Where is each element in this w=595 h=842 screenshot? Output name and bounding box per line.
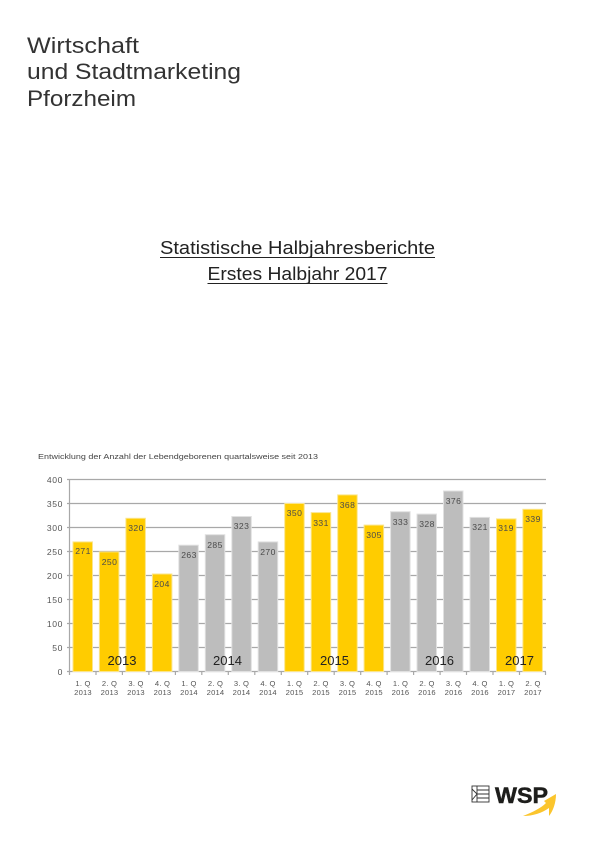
value labels: 333 (393, 517, 408, 527)
grid lines and axes (67, 480, 546, 675)
bar chart: births per quarter (47, 475, 546, 697)
y axis labels: 100 (47, 619, 63, 629)
value labels: 368 (340, 500, 355, 510)
year labels: 2013 (108, 653, 136, 668)
year labels (108, 653, 534, 668)
value labels: 271 (75, 546, 91, 556)
quarter labels: 4. Q (155, 679, 170, 688)
value labels: 331 (313, 518, 329, 528)
quarter labels: 2013 (127, 688, 145, 697)
year labels: 2015 (320, 653, 349, 668)
value labels: 263 (181, 550, 197, 560)
quarter labels: 1. Q (181, 679, 197, 688)
year labels: 2016 (425, 653, 454, 668)
quarter labels: 2016 (445, 688, 462, 697)
y axis labels: 50 (52, 643, 63, 653)
chart title: Entwicklung der Anzahl der Lebendgeborenen quartalsweise seit 2013 (38, 452, 318, 461)
value labels: 320 (128, 523, 144, 533)
quarter labels: 2. Q (102, 679, 117, 688)
value labels: 319 (498, 523, 514, 533)
value labels (75, 496, 541, 589)
value labels: 321 (472, 522, 488, 532)
quarter labels: 2015 (365, 688, 383, 697)
quarter labels: 2. Q (208, 679, 223, 688)
icon: logo building mark (472, 786, 489, 802)
quarter labels: 1. Q (287, 679, 302, 688)
quarter labels: 1. Q (75, 679, 91, 688)
year labels: 2014 (213, 653, 242, 668)
quarter labels: 2013 (74, 688, 92, 697)
quarter labels: 2. Q (419, 679, 435, 688)
title: organisation name: Wirtschaft (27, 33, 139, 58)
value labels: 250 (102, 557, 117, 567)
bars (73, 491, 542, 672)
y axis labels: 150 (47, 595, 63, 605)
heading: report title (160, 237, 435, 284)
quarter labels: 2017 (524, 688, 542, 697)
quarter labels: 3. Q (128, 679, 144, 688)
value labels: 305 (366, 530, 382, 540)
y axis labels: 0 (58, 667, 63, 677)
value labels: 285 (207, 540, 223, 550)
quarter labels: 2014 (180, 688, 198, 697)
value labels: 339 (525, 514, 541, 524)
title: organisation name: und Stadtmarketing (27, 59, 241, 84)
quarter labels (74, 679, 542, 697)
quarter labels: 2016 (418, 688, 436, 697)
heading: report title: Statistische Halbjahresberichte (160, 237, 435, 258)
quarter labels: 2013 (101, 688, 118, 697)
heading: report title: Erstes Halbjahr 2017 (208, 263, 388, 284)
y axis labels: 250 (47, 547, 63, 557)
y axis labels: 350 (47, 499, 63, 509)
quarter labels: 2014 (259, 688, 277, 697)
quarter labels: 2. Q (525, 679, 541, 688)
quarter labels: 2015 (339, 688, 356, 697)
value labels: 323 (234, 521, 249, 531)
quarter labels: 2014 (207, 688, 224, 697)
value labels: 270 (260, 547, 276, 557)
quarter labels: 2013 (154, 688, 171, 697)
year labels: 2017 (505, 653, 534, 668)
quarter labels: 4. Q (366, 679, 382, 688)
icon: yellow swoosh arrow (523, 794, 556, 816)
value labels: 204 (154, 579, 170, 589)
quarter labels: 2017 (498, 688, 515, 697)
y axis labels (47, 475, 63, 677)
quarter labels: 3. Q (446, 679, 461, 688)
y axis labels: 400 (47, 475, 63, 485)
quarter labels: 4. Q (260, 679, 276, 688)
quarter labels: 3. Q (234, 679, 249, 688)
y axis labels: 300 (47, 523, 63, 533)
title: organisation name: Pforzheim (27, 86, 136, 111)
quarter labels: 2014 (233, 688, 250, 697)
quarter labels: 1. Q (499, 679, 514, 688)
logo wordmark: WSP (495, 783, 548, 808)
quarter labels: 2016 (392, 688, 409, 697)
value labels: 376 (446, 496, 461, 506)
quarter labels: 4. Q (472, 679, 488, 688)
logo: WSP (472, 783, 556, 816)
title: organisation name (27, 33, 241, 111)
value labels: 350 (287, 508, 302, 518)
y axis labels: 200 (47, 571, 63, 581)
value labels: 328 (419, 519, 435, 529)
quarter labels: 2015 (312, 688, 330, 697)
quarter labels: 2015 (286, 688, 303, 697)
quarter labels: 3. Q (340, 679, 355, 688)
quarter labels: 1. Q (393, 679, 408, 688)
quarter labels: 2016 (471, 688, 489, 697)
quarter labels: 2. Q (313, 679, 329, 688)
